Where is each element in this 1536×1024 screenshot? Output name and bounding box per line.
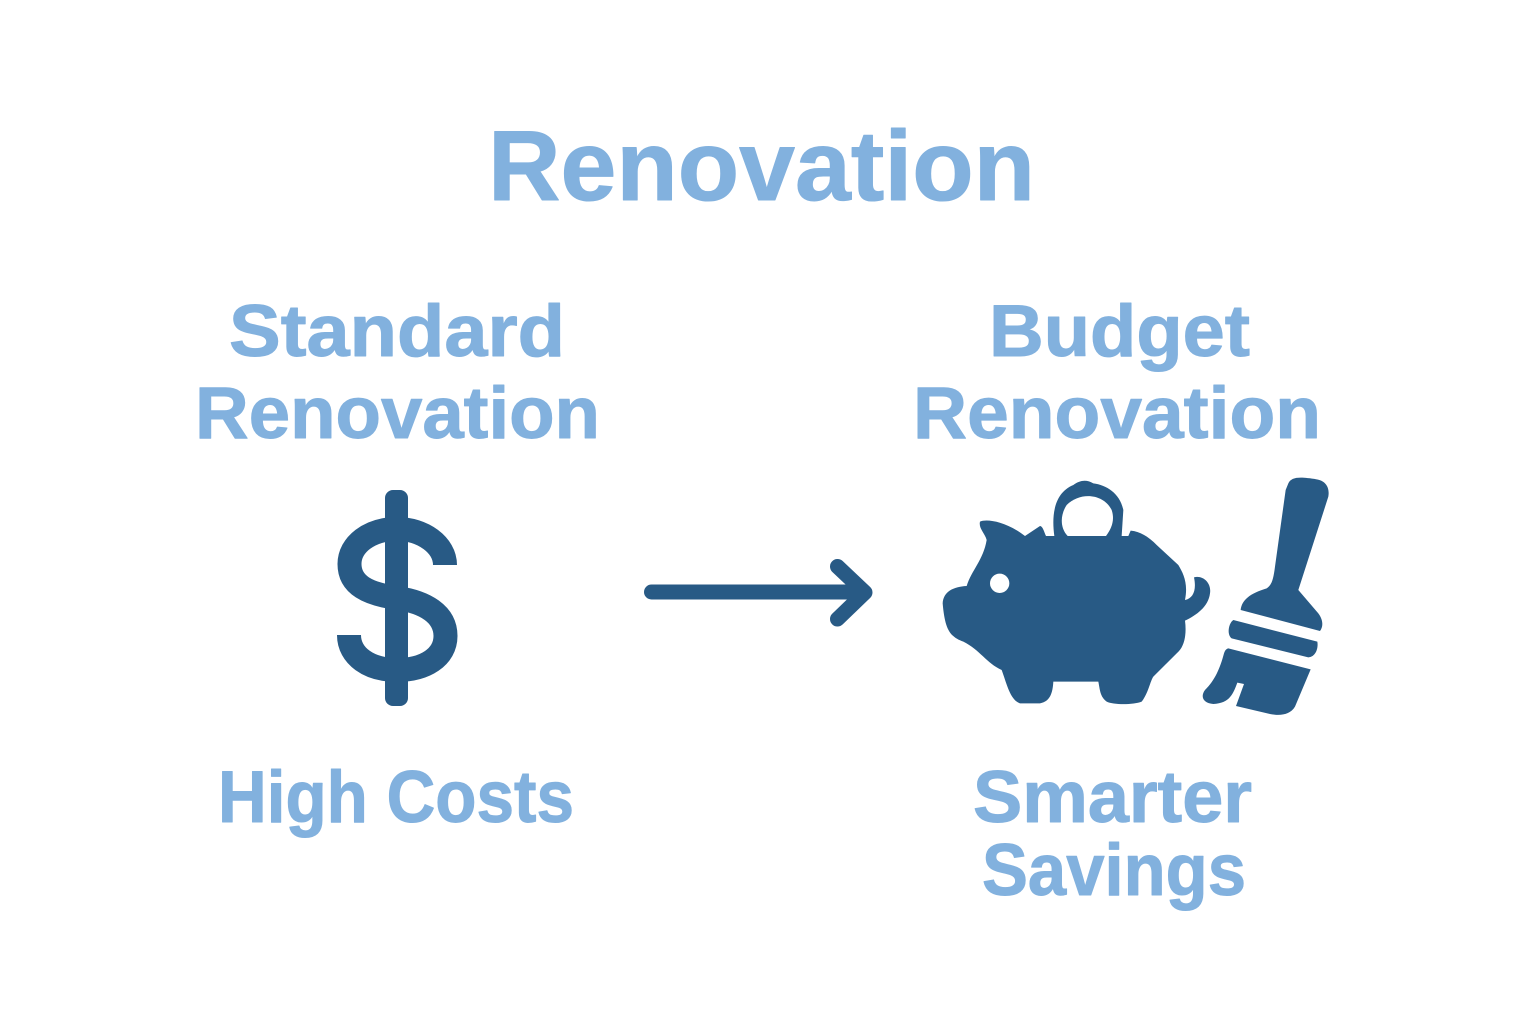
heading: standard renovation [195,291,600,454]
heading: standard renovation: Renovation [195,373,600,454]
icon: piggy bank [943,481,1210,704]
icon: dollar sign [349,490,446,706]
panel: standard renovation [195,291,600,838]
heading: standard renovation: Standard [229,291,565,372]
arrow [652,566,865,619]
label: smarter savings [973,757,1252,911]
title: Renovation [488,110,1035,221]
icon: paint brush [1203,478,1329,715]
panel: budget renovation [913,291,1329,911]
label: smarter savings: Smarter [973,757,1252,838]
heading: budget renovation [913,291,1321,454]
heading: budget renovation: Budget [989,291,1250,372]
heading: budget renovation: Renovation [913,373,1321,454]
label: high costs: High Costs [218,757,574,838]
label: smarter savings: Savings [982,830,1246,911]
